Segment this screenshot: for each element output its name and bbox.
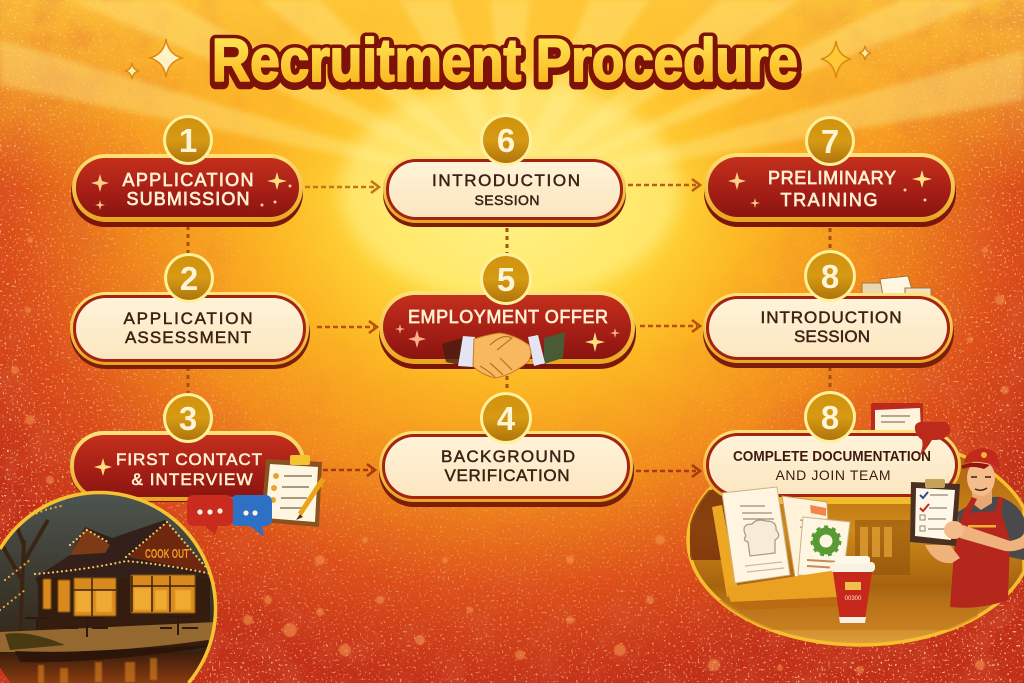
step 3 pill xyxy=(70,431,306,502)
badge 7 xyxy=(805,116,855,166)
label: INTRODUCTION xyxy=(432,171,580,190)
badge 8 xyxy=(804,250,856,302)
icon: coffee cup xyxy=(830,556,875,623)
label: AND JOIN TEAM xyxy=(776,467,890,483)
step 6 pill xyxy=(383,156,626,227)
badge 5: 5 xyxy=(497,261,515,298)
label: PRELIMINARY xyxy=(768,168,896,188)
icon: red speech tag xyxy=(915,422,950,458)
badge 8: 8 xyxy=(821,258,839,295)
label: APPLICATION xyxy=(122,170,254,190)
shirt xyxy=(958,497,1024,560)
arrow: 4 to 8 xyxy=(636,465,700,477)
arms xyxy=(925,545,960,563)
title text: Recruitment Procedure xyxy=(212,29,798,96)
apron xyxy=(950,497,1010,608)
step 2 pill xyxy=(70,292,310,369)
badge 1: 1 xyxy=(179,122,197,159)
step 7 pill xyxy=(704,153,956,227)
icon: folder behind final pill xyxy=(871,403,923,433)
icon: handshake xyxy=(442,332,565,378)
badge 8 final xyxy=(804,391,856,443)
badge 5 xyxy=(480,253,532,305)
final step pill xyxy=(703,430,961,504)
cap xyxy=(964,448,1000,470)
badge 1 xyxy=(163,115,213,165)
illustration: team member xyxy=(910,448,1024,608)
badge 6 xyxy=(480,114,532,166)
arrow: 2 to 5 xyxy=(317,321,377,333)
label: VERIFICATION xyxy=(444,466,570,485)
hand xyxy=(944,521,964,539)
connector arrows xyxy=(188,179,830,477)
label: COMPLETE DOCUMENTATION xyxy=(733,448,931,465)
arrow: 1 to 6 xyxy=(305,181,379,193)
badge 8 final: 8 xyxy=(821,399,839,436)
step 4 pill xyxy=(379,431,634,507)
panel: restaurant photo xyxy=(0,490,218,683)
sparkles xyxy=(94,458,112,476)
arrow: 5 to 8 xyxy=(640,320,700,332)
label: FIRST CONTACT xyxy=(116,450,262,469)
label: SUBMISSION xyxy=(126,189,250,209)
ground xyxy=(0,622,213,652)
head xyxy=(967,460,995,496)
arrow: 3 to 4 xyxy=(323,464,375,476)
icon: papers xyxy=(862,276,931,304)
badge 7: 7 xyxy=(821,123,839,160)
icon: coffee cup: 00300 xyxy=(845,596,862,602)
label: SESSION xyxy=(794,327,870,346)
sparkles xyxy=(91,172,292,210)
neck xyxy=(972,488,992,510)
label: TRAINING xyxy=(780,190,878,210)
label: BACKGROUND xyxy=(441,447,575,466)
label: INTRODUCTION xyxy=(760,308,902,327)
label: APPLICATION xyxy=(124,309,252,328)
clipboard xyxy=(910,482,960,546)
building xyxy=(35,520,212,590)
badge 3: 3 xyxy=(179,400,197,437)
step 8 pill xyxy=(703,276,954,368)
sparkles xyxy=(395,324,620,352)
sparkles xyxy=(728,170,932,208)
badge 2: 2 xyxy=(180,260,198,297)
sign: COOK OUT xyxy=(145,546,189,561)
label: & INTERVIEW xyxy=(132,470,252,489)
badge 2 xyxy=(164,253,214,303)
badge 4 xyxy=(480,392,532,444)
badge 4: 4 xyxy=(497,400,516,437)
step 5 pill xyxy=(379,291,636,369)
step 1 pill xyxy=(71,154,303,227)
label: SESSION xyxy=(474,192,540,208)
panel: onboarding scene xyxy=(688,435,1024,645)
vertical connectors xyxy=(188,226,830,394)
sparkles xyxy=(125,39,871,79)
badge 3 xyxy=(163,393,213,443)
label: ASSESSMENT xyxy=(125,328,251,347)
title: Recruitment Procedure xyxy=(212,27,798,94)
arrow: 6 to 7 xyxy=(628,179,700,191)
tree xyxy=(2,515,48,640)
label: EMPLOYMENT OFFER xyxy=(408,307,608,327)
icon: documents tray xyxy=(712,487,850,610)
icon: chat bubbles xyxy=(187,495,272,537)
icon: clipboard xyxy=(261,455,323,527)
badge 6: 6 xyxy=(497,122,515,159)
